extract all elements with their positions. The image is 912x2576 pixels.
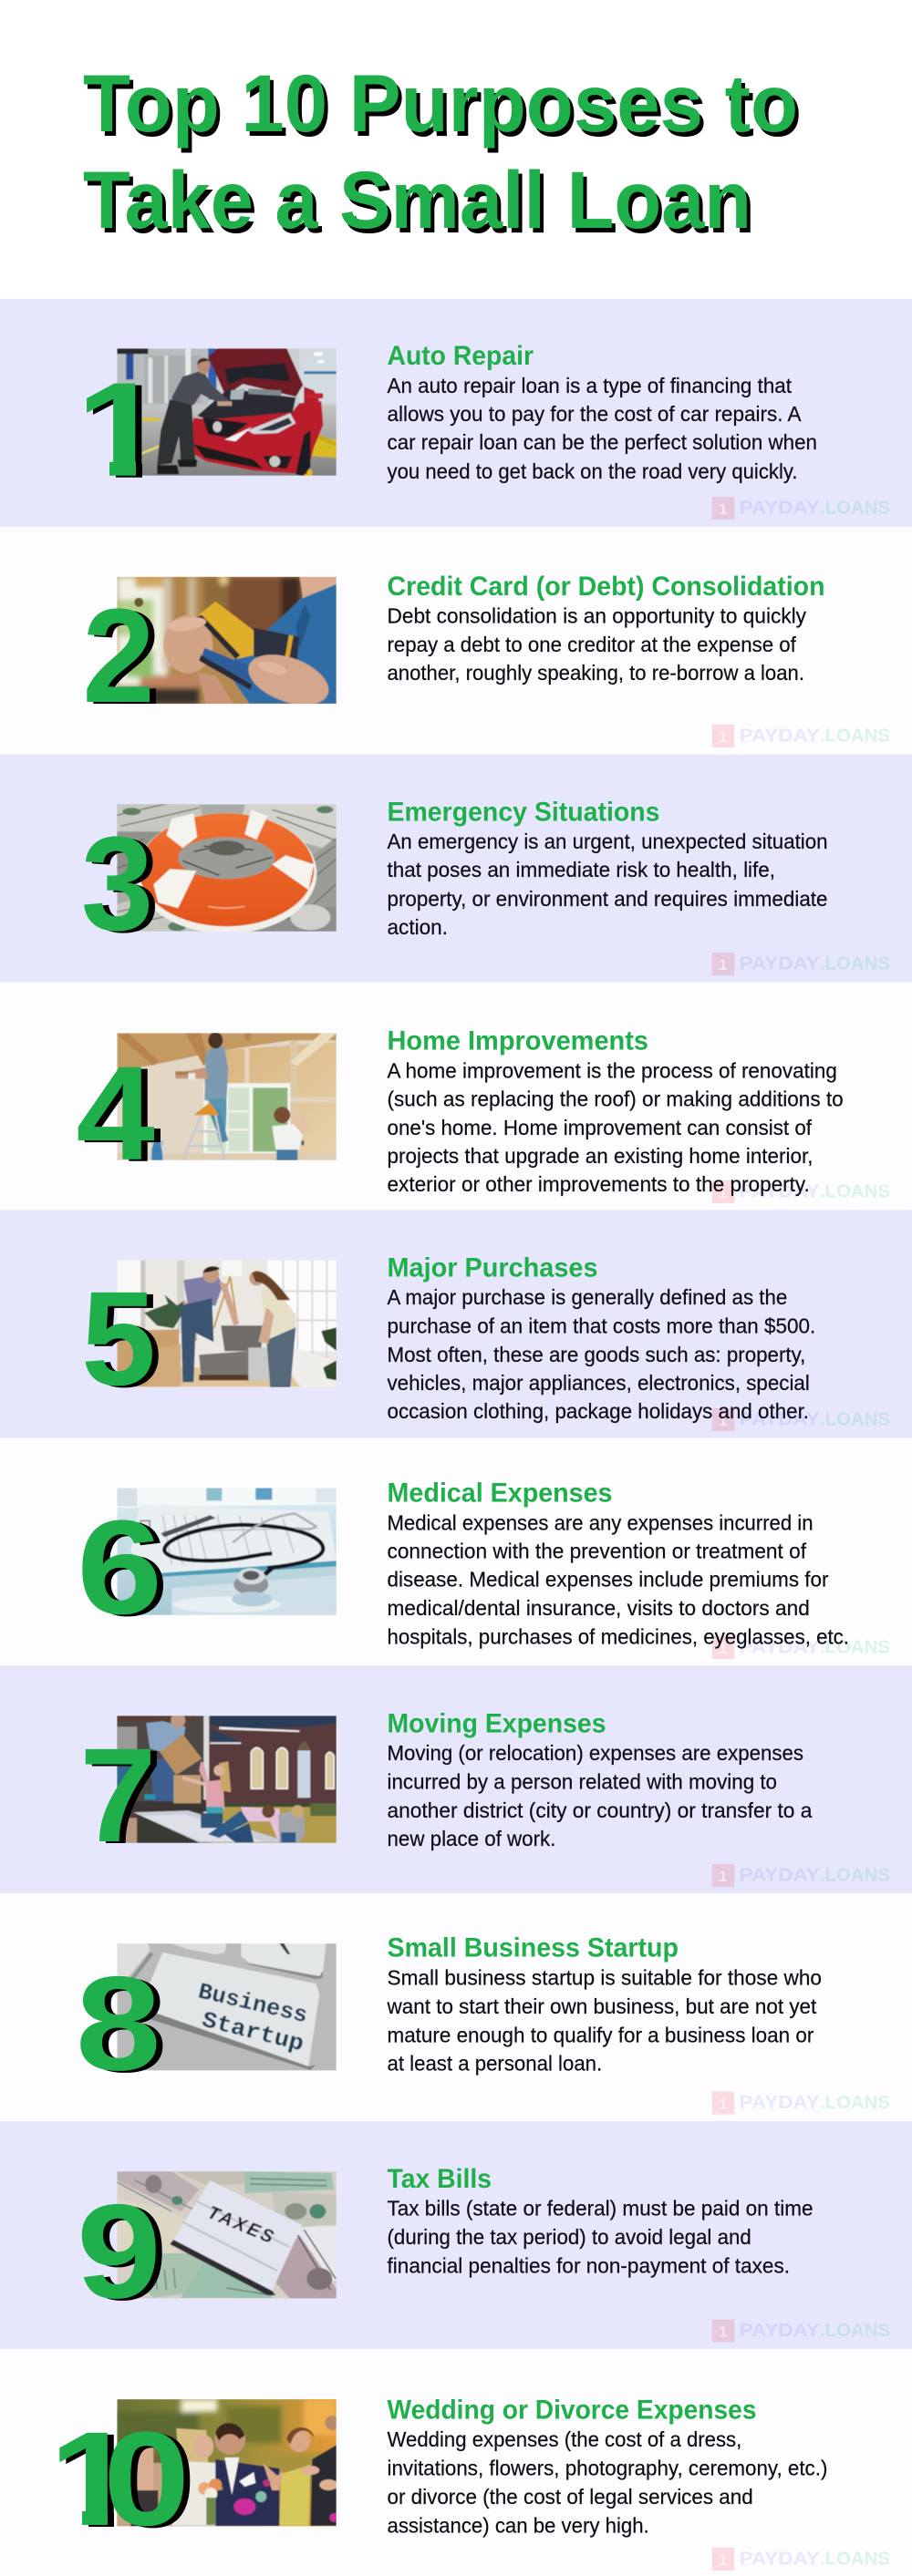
body text: want to start their own business, but are not yet [387, 1994, 817, 2018]
panel 5: major purchases [0, 1210, 912, 1437]
header background [0, 0, 912, 299]
body text [387, 603, 806, 685]
watermark: 1 [719, 728, 727, 746]
watermark: .LOANS [820, 1409, 890, 1429]
heading: Auto Repair [387, 341, 534, 371]
watermark: 1 [719, 2551, 727, 2569]
body text: An emergency is an urgent, unexpected situation [387, 829, 828, 853]
body text [387, 1741, 813, 1850]
heading: Small Business Startup [387, 1933, 679, 1963]
panel 3: emergency situations [0, 755, 912, 983]
watermark: 1 [719, 1412, 727, 1429]
body text: allows you to pay for the cost of car repairs. A [387, 402, 802, 426]
watermark: .LOANS [820, 1865, 890, 1885]
watermark: .LOANS [820, 1637, 890, 1657]
panel 4: home improvements [0, 983, 912, 1211]
photo: couple moving an armchair [117, 1260, 337, 1387]
body text: car repair loan can be the perfect solution when [387, 430, 817, 454]
watermark: 1 [719, 500, 727, 518]
body text: property, or environment and requires immediate [387, 887, 828, 911]
photo: taxes lightbox on dollar bills [117, 2171, 337, 2299]
body text: Small business startup is suitable for those who [387, 1966, 822, 1990]
body text: that poses an immediate risk to health, life, [387, 858, 775, 881]
body text: Most often, these are goods such as: property, [387, 1343, 805, 1366]
watermark [712, 2091, 890, 2115]
watermark: .LOANS [820, 2093, 890, 2113]
body text: mature enough to qualify for a business loan or [387, 2023, 814, 2046]
body text [387, 2427, 827, 2537]
body text: financial penalties for non-payment of taxes. [387, 2253, 790, 2277]
watermark: 1 [719, 1868, 727, 1885]
photo: wedding couple kissing [117, 2399, 337, 2527]
panel 6: medical expenses [0, 1437, 912, 1665]
number 10: 1 [49, 2404, 137, 2554]
body text: invitations, flowers, photography, ceremony, etc.) [387, 2457, 827, 2480]
body text: occasion clothing, package holidays and other. [387, 1399, 809, 1423]
watermark: .LOANS [820, 2321, 890, 2341]
watermark: .LOANS [820, 953, 890, 974]
body text: you need to get back on the road very quickly. [387, 459, 797, 483]
panel 9: tax bills [0, 2121, 912, 2349]
number 10 [59, 2431, 190, 2529]
body text: disease. Medical expenses include premiums for [387, 1568, 829, 1592]
watermark: PAYDAY [740, 1637, 820, 1657]
heading: Tax Bills [387, 2164, 492, 2194]
panel 7: moving expenses [0, 1665, 912, 1893]
body text: A major purchase is generally defined as the [387, 1285, 787, 1309]
panel 1: auto repair [0, 299, 912, 527]
watermark [712, 2548, 890, 2571]
body text [387, 829, 828, 939]
watermark [712, 1408, 890, 1431]
title: Take a Small Loan [83, 154, 751, 245]
body text [387, 374, 817, 483]
panel 10: wedding or divorce expenses [59, 2399, 890, 2571]
watermark: PAYDAY [740, 953, 820, 974]
body text: another district (city or country) or transfer to a [387, 1798, 813, 1822]
body text: A home improvement is the process of renovating [387, 1058, 837, 1082]
body text: another, roughly speaking, to re-borrow a loan. [387, 661, 804, 685]
watermark: PAYDAY [740, 498, 820, 518]
body text: medical/dental insurance, visits to doctors and [387, 1596, 810, 1620]
watermark: PAYDAY [740, 726, 820, 746]
photo: family moving into a house [117, 1716, 337, 1843]
watermark: PAYDAY [740, 2321, 820, 2341]
photo: painters renovating a room [117, 1033, 337, 1160]
number 8: 8 [76, 1949, 161, 2098]
body text: Wedding expenses (the cost of a dress, [387, 2427, 741, 2451]
photo: stethoscope on clipboard [117, 1488, 337, 1615]
body text: connection with the prevention or treatment of [387, 1539, 806, 1562]
watermark: PAYDAY [740, 1409, 820, 1429]
body text: or divorce (the cost of legal services and [387, 2485, 753, 2509]
photo: keyboard key business startup: Business [196, 1979, 310, 2029]
watermark [712, 2319, 890, 2343]
panel 8: small business startup [0, 1893, 912, 2121]
watermark: .LOANS [820, 1181, 890, 1201]
body text: projects that upgrade an existing home interior, [387, 1144, 814, 1168]
watermark [712, 1180, 890, 1203]
heading: Wedding or Divorce Expenses [387, 2395, 757, 2425]
body text: vehicles, major appliances, electronics, special [387, 1371, 810, 1395]
body text: assistance) can be very high. [387, 2513, 649, 2537]
body text: (such as replacing the roof) or making additions to [387, 1087, 844, 1111]
heading: Home Improvements [387, 1026, 648, 1056]
number 3: 3 [81, 809, 153, 958]
number 1: 1 [76, 355, 165, 504]
body text: Moving (or relocation) expenses are expenses [387, 1741, 803, 1765]
watermark [712, 1636, 890, 1659]
watermark: PAYDAY [740, 1865, 820, 1885]
body text: Debt consolidation is an opportunity to quickly [387, 603, 806, 627]
watermark: 1 [719, 2323, 727, 2341]
number 9: 9 [77, 2178, 161, 2326]
photo: keyboard key business startup [117, 1943, 337, 2071]
heading: Moving Expenses [387, 1709, 606, 1739]
heading: Major Purchases [387, 1253, 598, 1283]
body text: Medical expenses are any expenses incurred in [387, 1510, 814, 1534]
watermark [712, 497, 890, 520]
watermark: 1 [719, 1184, 727, 1201]
body text [387, 2197, 814, 2277]
body text: action. [387, 915, 448, 939]
watermark [712, 725, 890, 747]
number 5: 5 [81, 1264, 156, 1414]
body text: incurred by a person related with moving to [387, 1769, 777, 1793]
title [83, 57, 798, 245]
watermark: PAYDAY [740, 2093, 820, 2113]
body text: one's home. Home improvement can consist of [387, 1116, 812, 1139]
body text: purchase of an item that costs more than $500. [387, 1314, 815, 1337]
panel 2: credit card consolidation [0, 527, 912, 755]
body text [387, 1058, 844, 1196]
heading: Emergency Situations [387, 798, 660, 828]
photo: life ring on dollar bills [117, 804, 337, 932]
number 10: 0 [103, 2404, 190, 2553]
watermark: 1 [719, 956, 727, 974]
body text: exterior or other improvements to the property. [387, 1172, 810, 1196]
body text: Tax bills (state or federal) must be paid on time [387, 2197, 814, 2221]
watermark [712, 1864, 890, 1887]
watermark: 1 [719, 2095, 727, 2113]
photo: keyboard key business startup: Startup [199, 2007, 306, 2057]
title: Top 10 Purposes to [83, 57, 798, 149]
watermark: 1 [719, 1640, 727, 1657]
body text: An auto repair loan is a type of financing that [387, 374, 792, 397]
number 2: 2 [82, 581, 155, 730]
photo: mechanic and red car [117, 348, 337, 476]
body text [387, 1510, 849, 1648]
watermark: .LOANS [820, 726, 890, 746]
watermark: .LOANS [820, 2549, 890, 2569]
watermark: PAYDAY [740, 1181, 820, 1201]
body text: at least a personal loan. [387, 2051, 602, 2075]
number 6: 6 [77, 1492, 162, 1643]
body text: hospitals, purchases of medicines, eyeglasses, etc. [387, 1624, 849, 1648]
body text: repay a debt to one creditor at the expense of [387, 633, 796, 656]
body text: (during the tax period) to avoid legal and [387, 2225, 751, 2249]
watermark [712, 953, 890, 975]
body text: new place of work. [387, 1827, 555, 1850]
number 4: 4 [76, 1039, 155, 1189]
photo: hands holding credit cards [117, 576, 337, 704]
photo: taxes lightbox on dollar bills: TAXES [204, 2202, 277, 2248]
heading: Credit Card (or Debt) Consolidation [387, 572, 824, 602]
watermark: .LOANS [820, 498, 890, 518]
number 7: 7 [79, 1720, 157, 1870]
body text [387, 1966, 822, 2075]
watermark: PAYDAY [740, 2549, 820, 2569]
heading: Medical Expenses [387, 1478, 613, 1508]
body text [387, 1285, 815, 1423]
